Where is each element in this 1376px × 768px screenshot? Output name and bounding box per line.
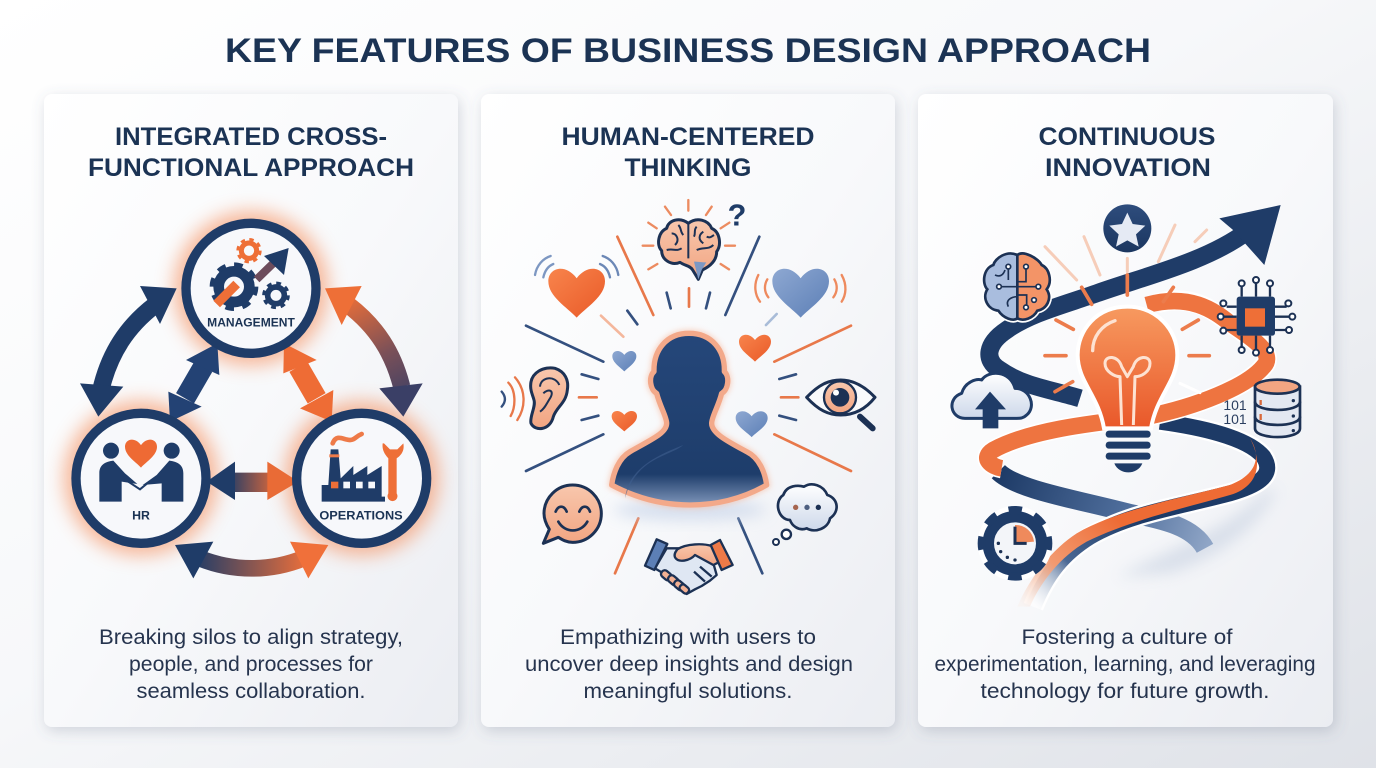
icon: gear with clock (976, 504, 1054, 583)
panel card (481, 94, 895, 727)
panel heading: THINKING (624, 154, 752, 182)
panel heading: FUNCTIONAL APPROACH (88, 154, 414, 182)
binary digits: 101 (1223, 397, 1247, 413)
icon: light bulb (1078, 307, 1177, 472)
icon: factory and wrench (322, 434, 404, 502)
icon: people shaking hands with heart (99, 440, 183, 502)
arrow: management to HR outer (80, 286, 177, 417)
arrow: management to HR inner (168, 343, 219, 422)
rays around bulb (1045, 275, 1209, 392)
silhouette (612, 333, 767, 520)
icon: star badge (1103, 204, 1151, 252)
panel: continuous innovation (918, 94, 1333, 727)
radiating rays (526, 200, 851, 573)
icon: microchip (1218, 277, 1295, 356)
icon: smiley speech bubble (543, 485, 601, 543)
label: management: MANAGEMENT (207, 315, 295, 329)
icon: brain with question mark (659, 198, 746, 279)
faint rays (1045, 225, 1207, 280)
icon: brain circuit (984, 253, 1050, 320)
icon: thought cloud (773, 484, 837, 545)
ribbon: lower navy band (998, 472, 1205, 548)
ribbon: upper navy growth arrow (989, 205, 1281, 398)
heart: small blue upper (612, 351, 636, 371)
arrow: HR to operations inner (207, 462, 298, 500)
ribbon: lower navy to fade (1033, 422, 1267, 607)
label: HR: HR (132, 508, 150, 522)
icon: ear (502, 368, 568, 429)
ribbon: orange loop (987, 300, 1267, 468)
panel card (918, 94, 1333, 727)
panel description: experimentation, learning, and leveraging (934, 653, 1316, 676)
panel description: meaningful solutions. (584, 680, 792, 703)
panel: integrated cross-functional approach (44, 94, 458, 727)
icon: gears and growth arrow (212, 239, 289, 309)
panel heading: INTEGRATED CROSS- (115, 123, 387, 151)
circle: operations (297, 413, 427, 543)
ribbon: lower orange (1017, 438, 1257, 607)
panel description: seamless collaboration. (136, 680, 366, 703)
icon: eye with magnifier (807, 380, 875, 428)
hearts (548, 269, 829, 437)
panel description: Fostering a culture of (1022, 626, 1233, 649)
question mark: ? (728, 198, 746, 232)
panel description: Empathizing with users to (560, 626, 816, 649)
label: operations: OPERATIONS (319, 508, 403, 522)
arrow: management to operations outer (325, 286, 423, 417)
sound waves beside hearts (535, 256, 845, 302)
ribbon shadow (1117, 490, 1277, 577)
heart: small orange lower (612, 411, 637, 431)
icon: cloud upload (952, 373, 1031, 428)
orange glow (64, 211, 439, 556)
binary digits: 101 (1223, 411, 1247, 427)
panel description: people, and processes for (129, 653, 373, 676)
panel heading: CONTINUOUS (1038, 123, 1216, 151)
heart: large orange (548, 271, 605, 321)
innovation illustration (952, 204, 1300, 607)
heart: small blue lower (736, 411, 768, 437)
panel: human-centered thinking (481, 94, 895, 727)
panel card (44, 94, 458, 727)
circle: HR (76, 413, 206, 543)
circle: management (186, 223, 316, 353)
cycle diagram (64, 211, 439, 578)
empathy illustration (502, 198, 875, 595)
title: KEY FEATURES OF BUSINESS DESIGN APPROACH (225, 32, 1151, 70)
panel heading: INNOVATION (1045, 154, 1211, 182)
arrow: HR to operations outer (175, 542, 328, 578)
panel description: Breaking silos to align strategy, (99, 626, 403, 649)
heart: large blue (772, 271, 829, 321)
icon: handshake (645, 539, 733, 595)
panel heading: HUMAN-CENTERED (562, 123, 814, 151)
icon: database (1223, 380, 1300, 437)
arrow: management to operations inner (283, 343, 333, 422)
panel description: technology for future growth. (980, 680, 1270, 703)
panel description: uncover deep insights and design (525, 653, 853, 676)
heart: small orange upper (739, 335, 771, 362)
